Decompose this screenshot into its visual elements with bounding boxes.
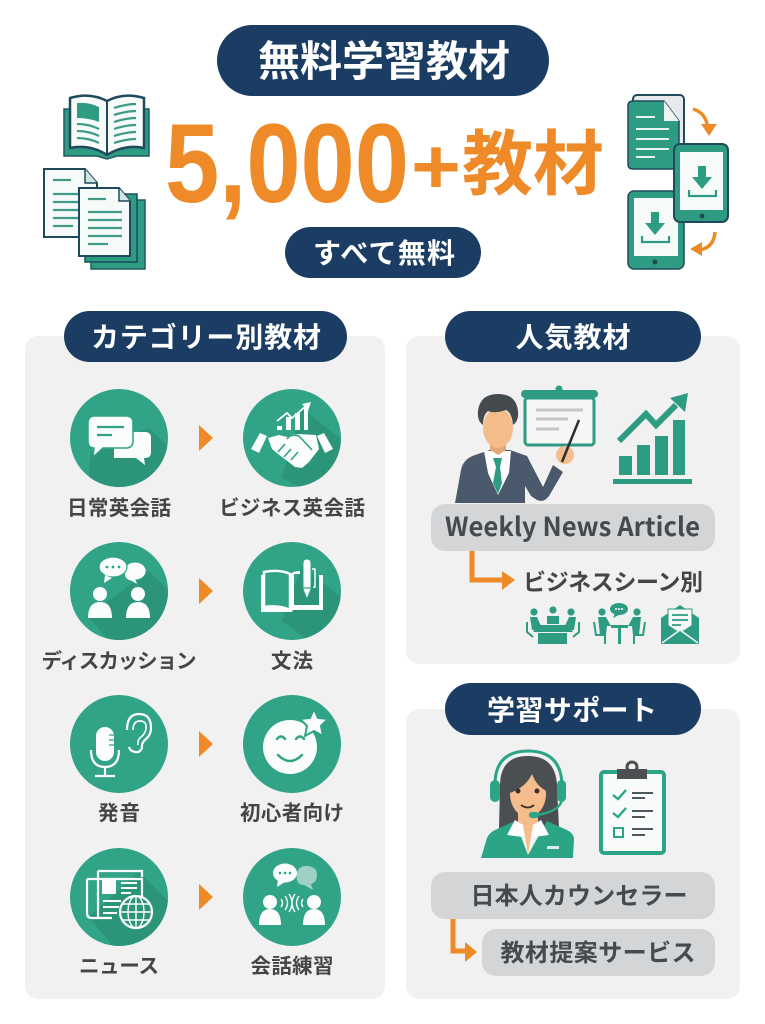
panel: popular materials [406, 311, 740, 664]
pill: material suggestion service: 教材提案サービス [500, 940, 696, 967]
icon: business conversation [243, 389, 341, 487]
arrow [199, 425, 213, 451]
panel: learning support [406, 683, 740, 999]
icon: presenter [455, 394, 579, 503]
icon: grammar [243, 542, 341, 640]
arrow: elbow [472, 551, 515, 590]
icon: counselor [481, 751, 574, 858]
icon: daily conversation [70, 389, 168, 487]
heading: learning support [445, 683, 701, 735]
icon: document stack [44, 169, 145, 269]
icon: talk at table [594, 603, 645, 644]
icon: beginners [243, 695, 341, 793]
label: 日常英会話 [67, 497, 171, 520]
headline number: 5,000 [165, 101, 409, 226]
label: 初心者向け [240, 802, 344, 825]
panel: categories [25, 311, 385, 999]
arrow [199, 884, 213, 910]
icon: meeting [527, 606, 579, 644]
icon: discussion [70, 542, 168, 640]
headline number: + [411, 122, 461, 210]
subtitle pill: すべて無料 [313, 238, 455, 269]
label: 文法 [271, 650, 314, 673]
heading: learning support: 学習サポート [487, 695, 657, 726]
icon: presentation board [521, 386, 598, 445]
arrow [199, 731, 213, 757]
icon: pronunciation [70, 695, 168, 793]
pill: Japanese counselor: 日本人カウンセラー [470, 883, 688, 910]
pill: material suggestion service [482, 929, 715, 976]
label: ディスカッション [42, 649, 196, 673]
heading: popular materials [445, 311, 701, 362]
icon: conversation practice [243, 848, 341, 946]
icon: growth chart [613, 393, 692, 484]
text: by business scene: ビジネスシーン別 [523, 569, 703, 595]
icon: clipboard checklist [601, 762, 664, 853]
icon: news [70, 848, 168, 946]
headline number: 教材 [462, 126, 604, 205]
heading: categories [64, 311, 347, 362]
pill: Weekly News Article: Weekly News Article [445, 507, 700, 544]
title pill: 無料学習教材 [258, 38, 510, 85]
title pill [217, 25, 549, 96]
headline number [165, 101, 604, 226]
heading: categories: カテゴリー別教材 [91, 321, 321, 353]
heading: popular materials: 人気教材 [516, 322, 630, 353]
label: ビジネス英会話 [219, 497, 365, 520]
label: ニュース [79, 955, 159, 978]
icon: open book [64, 96, 149, 159]
label: 発音 [98, 802, 140, 825]
subtitle pill [285, 227, 481, 278]
pill: Japanese counselor [431, 872, 715, 919]
arrow: elbow [453, 919, 477, 962]
arrow [199, 578, 213, 604]
label: 会話練習 [250, 955, 334, 978]
icon: email [661, 605, 699, 644]
icon: document and tablets with download [628, 95, 728, 269]
